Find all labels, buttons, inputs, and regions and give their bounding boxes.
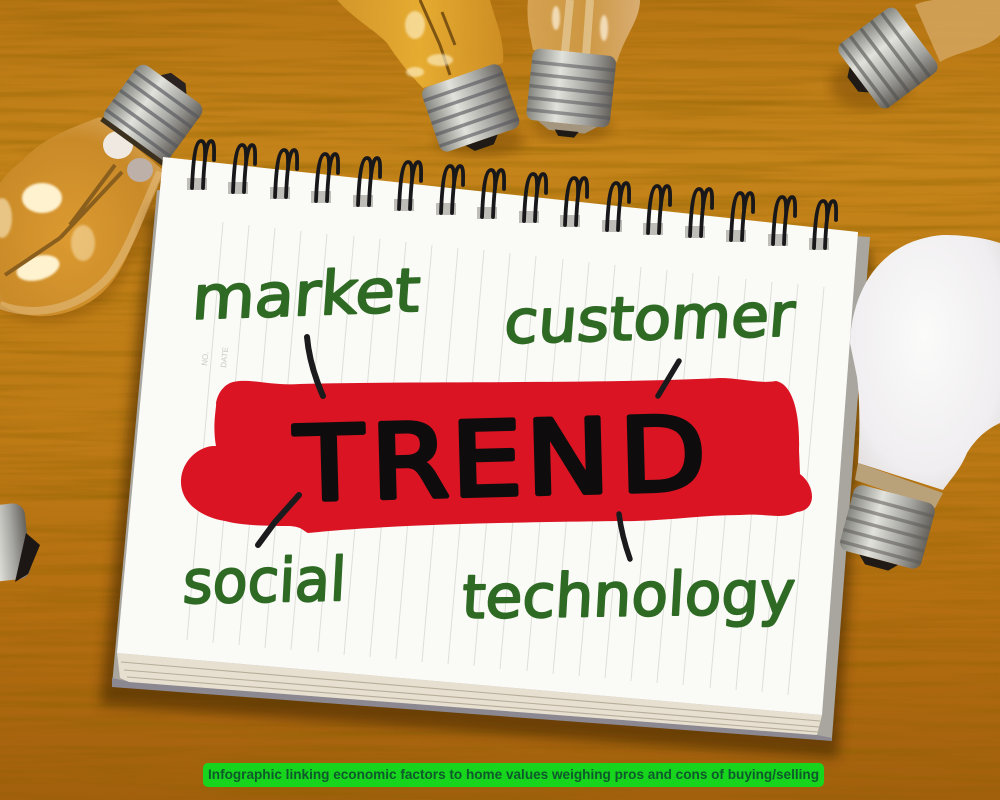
- back cover: [112, 190, 870, 738]
- icon: white bulb right: [836, 235, 1000, 578]
- page stack: [117, 653, 822, 735]
- icon: clear bulb top center-left: [337, 0, 525, 161]
- icon: clear bulb top right: [829, 0, 1000, 116]
- connector lines: [258, 337, 679, 559]
- word: social: social: [181, 545, 348, 618]
- word: technology: technology: [460, 558, 797, 633]
- top page: [117, 157, 858, 715]
- red highlight blob: [181, 378, 812, 533]
- icon: clear bulb top center-right: [524, 0, 640, 141]
- bottom cover edge: [112, 678, 832, 741]
- icon: bulb base left edge: [0, 502, 40, 583]
- notebook: [100, 141, 872, 758]
- word: TREND: TREND: [292, 395, 707, 525]
- caption bar: Infographic linking economic factors to home values weighing pros and cons of buying/selling: [208, 767, 819, 782]
- notebook shadow: [100, 210, 872, 758]
- word: market: market: [190, 256, 423, 334]
- date marks: DATE: [219, 347, 230, 368]
- caption bar: [203, 763, 824, 787]
- date marks: NO.: [200, 351, 210, 366]
- bulb collar: [855, 463, 943, 508]
- date marks: [200, 347, 230, 368]
- spiral binding: [187, 141, 836, 250]
- ruled lines: [187, 222, 824, 695]
- word: customer: customer: [502, 280, 797, 358]
- icon: clear bulb left: [0, 55, 211, 322]
